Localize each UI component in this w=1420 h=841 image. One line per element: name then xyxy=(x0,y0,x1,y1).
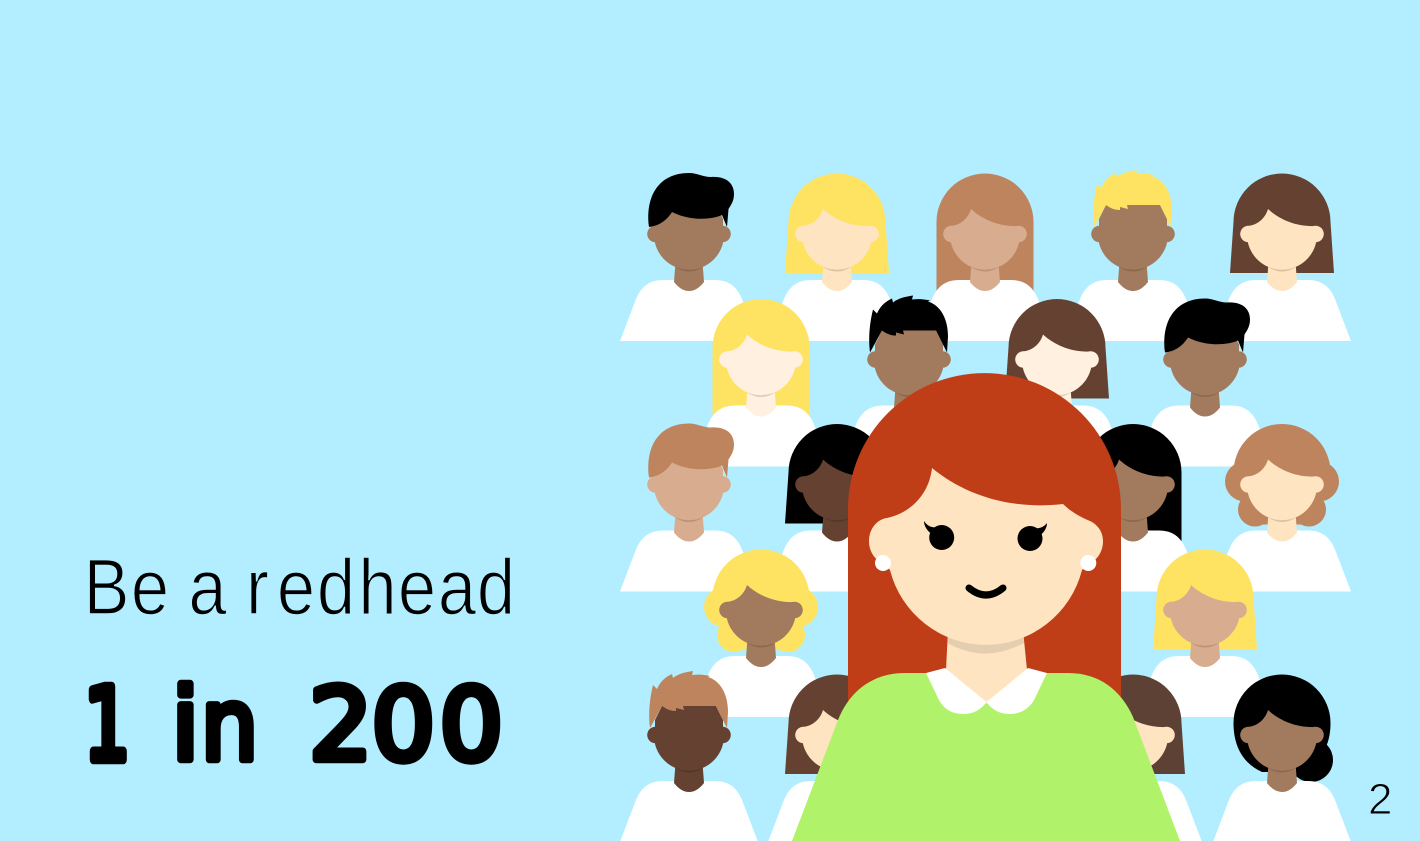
person: row 5, brown bob xyxy=(768,675,906,841)
face xyxy=(869,468,1103,645)
earrings xyxy=(875,555,1096,571)
smile xyxy=(969,588,1003,595)
person: row 5, black hair with bun xyxy=(1213,675,1351,841)
person: row 1, blonde spiky hair xyxy=(1064,170,1202,341)
neck xyxy=(946,630,1027,704)
person: row 1, brown bob xyxy=(1213,174,1351,341)
person: row 4, blonde bob xyxy=(1136,550,1274,717)
person: row 3, light brown curly hair xyxy=(1213,424,1351,592)
person: row 1, light brown long hair xyxy=(916,174,1054,341)
statistic: 1 in 200: 0 xyxy=(440,666,503,784)
page number: 2 xyxy=(1368,775,1392,824)
person: row 2, blonde long hair xyxy=(692,299,830,466)
person: row 3, light brown quiff xyxy=(620,424,758,592)
person: row 1, black quiff xyxy=(620,173,758,341)
statistic: 1 in 200: 0 xyxy=(372,666,435,784)
person: row 3, black long hair xyxy=(1064,424,1202,592)
neck shadow xyxy=(948,630,1024,654)
person: row 4, blonde curly hair xyxy=(692,550,830,717)
statistic: 1 in 200 xyxy=(84,666,503,784)
green sweater xyxy=(792,673,1180,841)
person: row 3, black bob xyxy=(768,424,906,592)
statistic: 1 in 200: i xyxy=(172,666,199,784)
heading: Be a redhead: Be a redhead xyxy=(84,543,515,631)
statistic: 1 in 200: 2 xyxy=(309,666,373,784)
eyes with lashes xyxy=(924,521,1047,551)
person: row 5, light brown spiky hair xyxy=(620,671,758,841)
crowd of people xyxy=(620,170,1351,841)
person: row 2, brown bob xyxy=(988,299,1126,466)
white collar xyxy=(926,668,1047,714)
statistic: 1 in 200: 1 xyxy=(84,667,130,784)
person: row 2, black quiff xyxy=(1136,298,1274,466)
red hair xyxy=(848,373,1121,730)
person: row 5, dark brown bob xyxy=(1064,675,1202,841)
person: row 2, black spiky hair xyxy=(840,296,978,466)
person: row 1, blonde bob xyxy=(768,174,906,341)
statistic: 1 in 200: n xyxy=(201,668,258,784)
redhead woman xyxy=(792,373,1180,841)
